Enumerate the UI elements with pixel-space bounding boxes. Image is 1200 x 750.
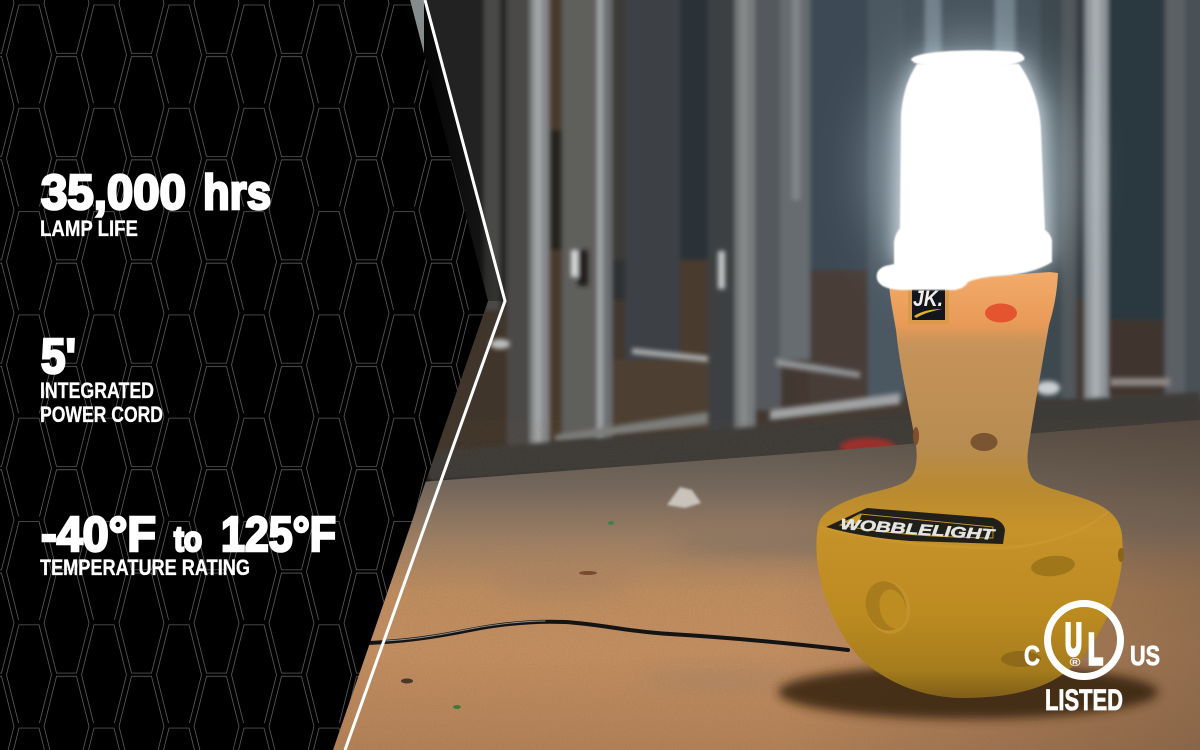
caption: temperature rating: TEMPERATURE RATING — [40, 555, 250, 580]
left black panel — [0, 0, 490, 750]
glowing globe — [877, 64, 1052, 290]
value: temperature range — [41, 508, 336, 562]
caption: integrated power cord — [40, 378, 163, 427]
c US text — [1024, 640, 1160, 671]
lamp body: neck and bowl — [816, 272, 1122, 698]
work light: Wobblelight lamp — [778, 50, 1158, 719]
hexagon pattern — [0, 0, 490, 750]
background photo: construction site — [330, 0, 1200, 750]
value: 35,000 hrs — [41, 166, 271, 220]
Wobblelight label — [826, 508, 1005, 544]
value: temperature range: 125°F — [221, 508, 336, 562]
value: 35,000 hrs: hrs — [203, 166, 271, 220]
stat: temperature rating — [40, 508, 336, 580]
Wobblelight label: WOBBLELIGHT — [840, 516, 997, 544]
white chevron line — [345, 0, 505, 750]
floor shadow — [778, 665, 1158, 719]
JK badge — [908, 285, 949, 324]
power cord — [368, 621, 848, 650]
caption: lamp life: LAMP LIFE — [40, 216, 138, 241]
globe top lip — [911, 50, 1024, 66]
stat: lamp life — [40, 166, 271, 241]
neck holes — [913, 304, 1017, 451]
listed text: LISTED — [1045, 684, 1123, 717]
JK badge: JK. — [913, 286, 943, 311]
bowl holes — [860, 548, 1124, 667]
stud sliver at panel top — [410, 0, 424, 54]
floor track debris band — [420, 392, 1200, 482]
value: temperature range: -40°F — [41, 508, 156, 562]
floor debris — [401, 487, 701, 709]
dark edge behind chevron — [400, 0, 505, 301]
caption: integrated power cord: POWER CORD — [40, 402, 163, 427]
UL ring — [1048, 604, 1120, 676]
value: temperature range: to — [174, 520, 202, 559]
caption: integrated power cord: INTEGRATED — [40, 378, 154, 403]
c US text: C — [1024, 640, 1040, 671]
UL letters: U — [1065, 614, 1082, 665]
stat: power cord — [40, 330, 163, 427]
plywood floor — [330, 420, 1200, 750]
stud slots and floor tracks — [490, 250, 1170, 442]
value: 5 feet: 5' — [41, 330, 76, 384]
wall and steel studs — [400, 0, 1200, 480]
registered mark: ® — [1070, 657, 1080, 669]
UL letters: L — [1088, 625, 1103, 674]
lamp glow — [872, 40, 1072, 300]
c US text: US — [1130, 640, 1160, 671]
UL listed certification mark — [1024, 604, 1160, 717]
value: 35,000 hrs: 35,000 — [41, 166, 186, 220]
bowl rim crease — [820, 512, 1108, 548]
